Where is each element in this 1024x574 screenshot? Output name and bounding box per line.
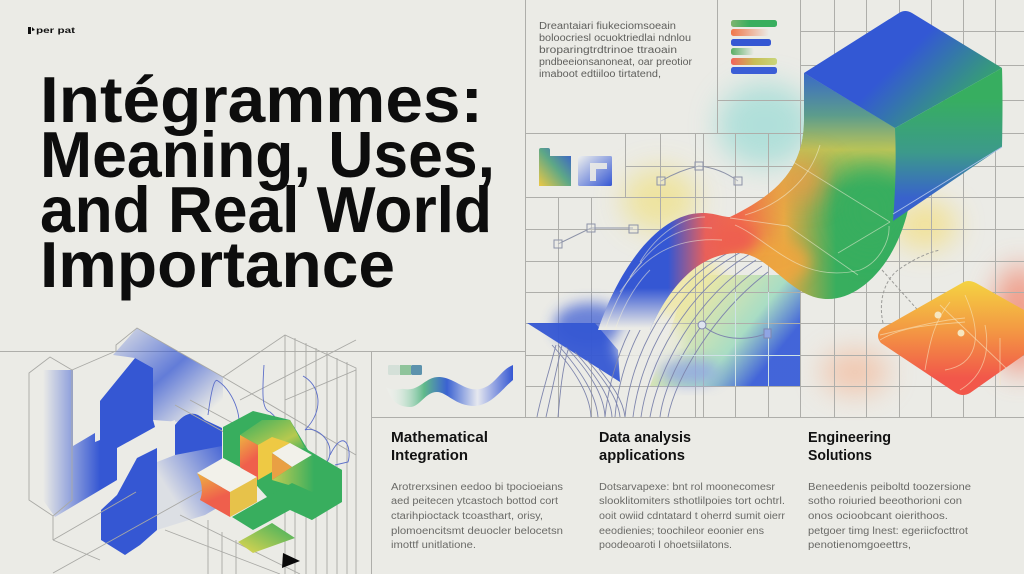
column: engineering solutions: onos ocioobcant oierithoos. <box>808 511 948 522</box>
column: mathematical integration: Mathematical <box>391 430 488 446</box>
intro text block: boloocriesl ocuoktriedlai ndnlou <box>539 33 691 44</box>
column: engineering solutions: Engineering <box>808 430 891 446</box>
intro text block <box>539 21 693 80</box>
column: mathematical integration: plomoencitsmt deuocler belocetsn <box>391 526 563 537</box>
intro text block: pndbeeionsanoneat, oar preotior <box>539 57 693 68</box>
node curve upper <box>554 162 742 248</box>
intro text block: broparingtrdtrinoe ttraoain <box>539 45 677 56</box>
logo <box>28 26 75 35</box>
column: mathematical integration: imottf unitlatione. <box>391 540 476 551</box>
column: mathematical integration <box>391 430 563 551</box>
title: Meaning, Uses, <box>40 118 495 191</box>
column: engineering solutions <box>808 430 971 551</box>
column: data analysis applications: Data analysis <box>599 430 691 446</box>
gradient square behind ribbon <box>650 275 800 386</box>
black triangle marker <box>282 553 300 568</box>
bottom left isometric illustration <box>29 328 356 574</box>
logo: per pat <box>36 26 75 35</box>
gridlines inside gradient square <box>680 292 800 386</box>
column: data analysis applications <box>599 430 786 551</box>
small block icons <box>539 148 612 186</box>
column: engineering solutions: penotienomgoeettrs, <box>808 540 911 551</box>
title: and Real World <box>40 173 492 246</box>
intro text block: imaboot edtiiloo tirtatend, <box>539 69 661 80</box>
column: mathematical integration: aed peitecen ytcastoch bottod cort <box>391 496 558 507</box>
background colour glows <box>622 83 1024 394</box>
title: Intégrammes: <box>40 63 483 136</box>
thin blue contour curves <box>208 365 349 468</box>
column: data analysis applications: poodeoaroti l ohoetsiilatons. <box>599 540 732 551</box>
green and orange isometric blocks <box>197 411 342 553</box>
column: data analysis applications: applications <box>599 448 685 464</box>
cube right face <box>893 68 1002 221</box>
intro text block: Dreantaiari fiukeciomsoeain <box>539 21 676 32</box>
title: Importance <box>40 228 395 301</box>
fan of thin arc lines <box>537 240 768 417</box>
column: data analysis applications: eeodienies; toochileor eoonier ens <box>599 526 764 537</box>
column: mathematical integration: ctarihpioctack tcoasthart, orisy, <box>391 511 543 522</box>
column: data analysis applications: slooklitomiters sthotlilpoies tort ochtrl. <box>599 496 785 507</box>
small swatches and wave <box>386 365 513 407</box>
cube edge highlight <box>893 147 1002 214</box>
blue gradient masses <box>43 328 223 555</box>
cream sliver <box>95 400 100 442</box>
column: engineering solutions: Solutions <box>808 448 872 464</box>
outline wireframe <box>29 328 356 574</box>
cube top face <box>804 11 1002 128</box>
diamond with geometric construction <box>878 250 1024 395</box>
blue blur and triangle lower left of ribbon <box>527 303 720 385</box>
column: data analysis applications: Dotsarvapexe: bnt rol moonecomesr <box>599 482 776 493</box>
column: engineering solutions: sotho roiuried beeothorioni con <box>808 496 962 507</box>
column: mathematical integration: Arotrerxsinen eedoo bi tpocioeians <box>391 482 563 493</box>
column: data analysis applications: ooit owiid cdntatard t oherrd sumit oierr <box>599 511 786 522</box>
colour bar legend <box>731 20 777 74</box>
column: mathematical integration: Integration <box>391 448 468 464</box>
node curve lower <box>698 321 771 338</box>
main ribbon <box>598 73 908 330</box>
column: engineering solutions: petgoer timg lnest: egeriicfocttrot <box>808 526 968 537</box>
title <box>40 63 495 301</box>
ribbon contour lines <box>605 145 890 330</box>
column: engineering solutions: Beneedenis peiboltd toozersione <box>808 482 971 493</box>
